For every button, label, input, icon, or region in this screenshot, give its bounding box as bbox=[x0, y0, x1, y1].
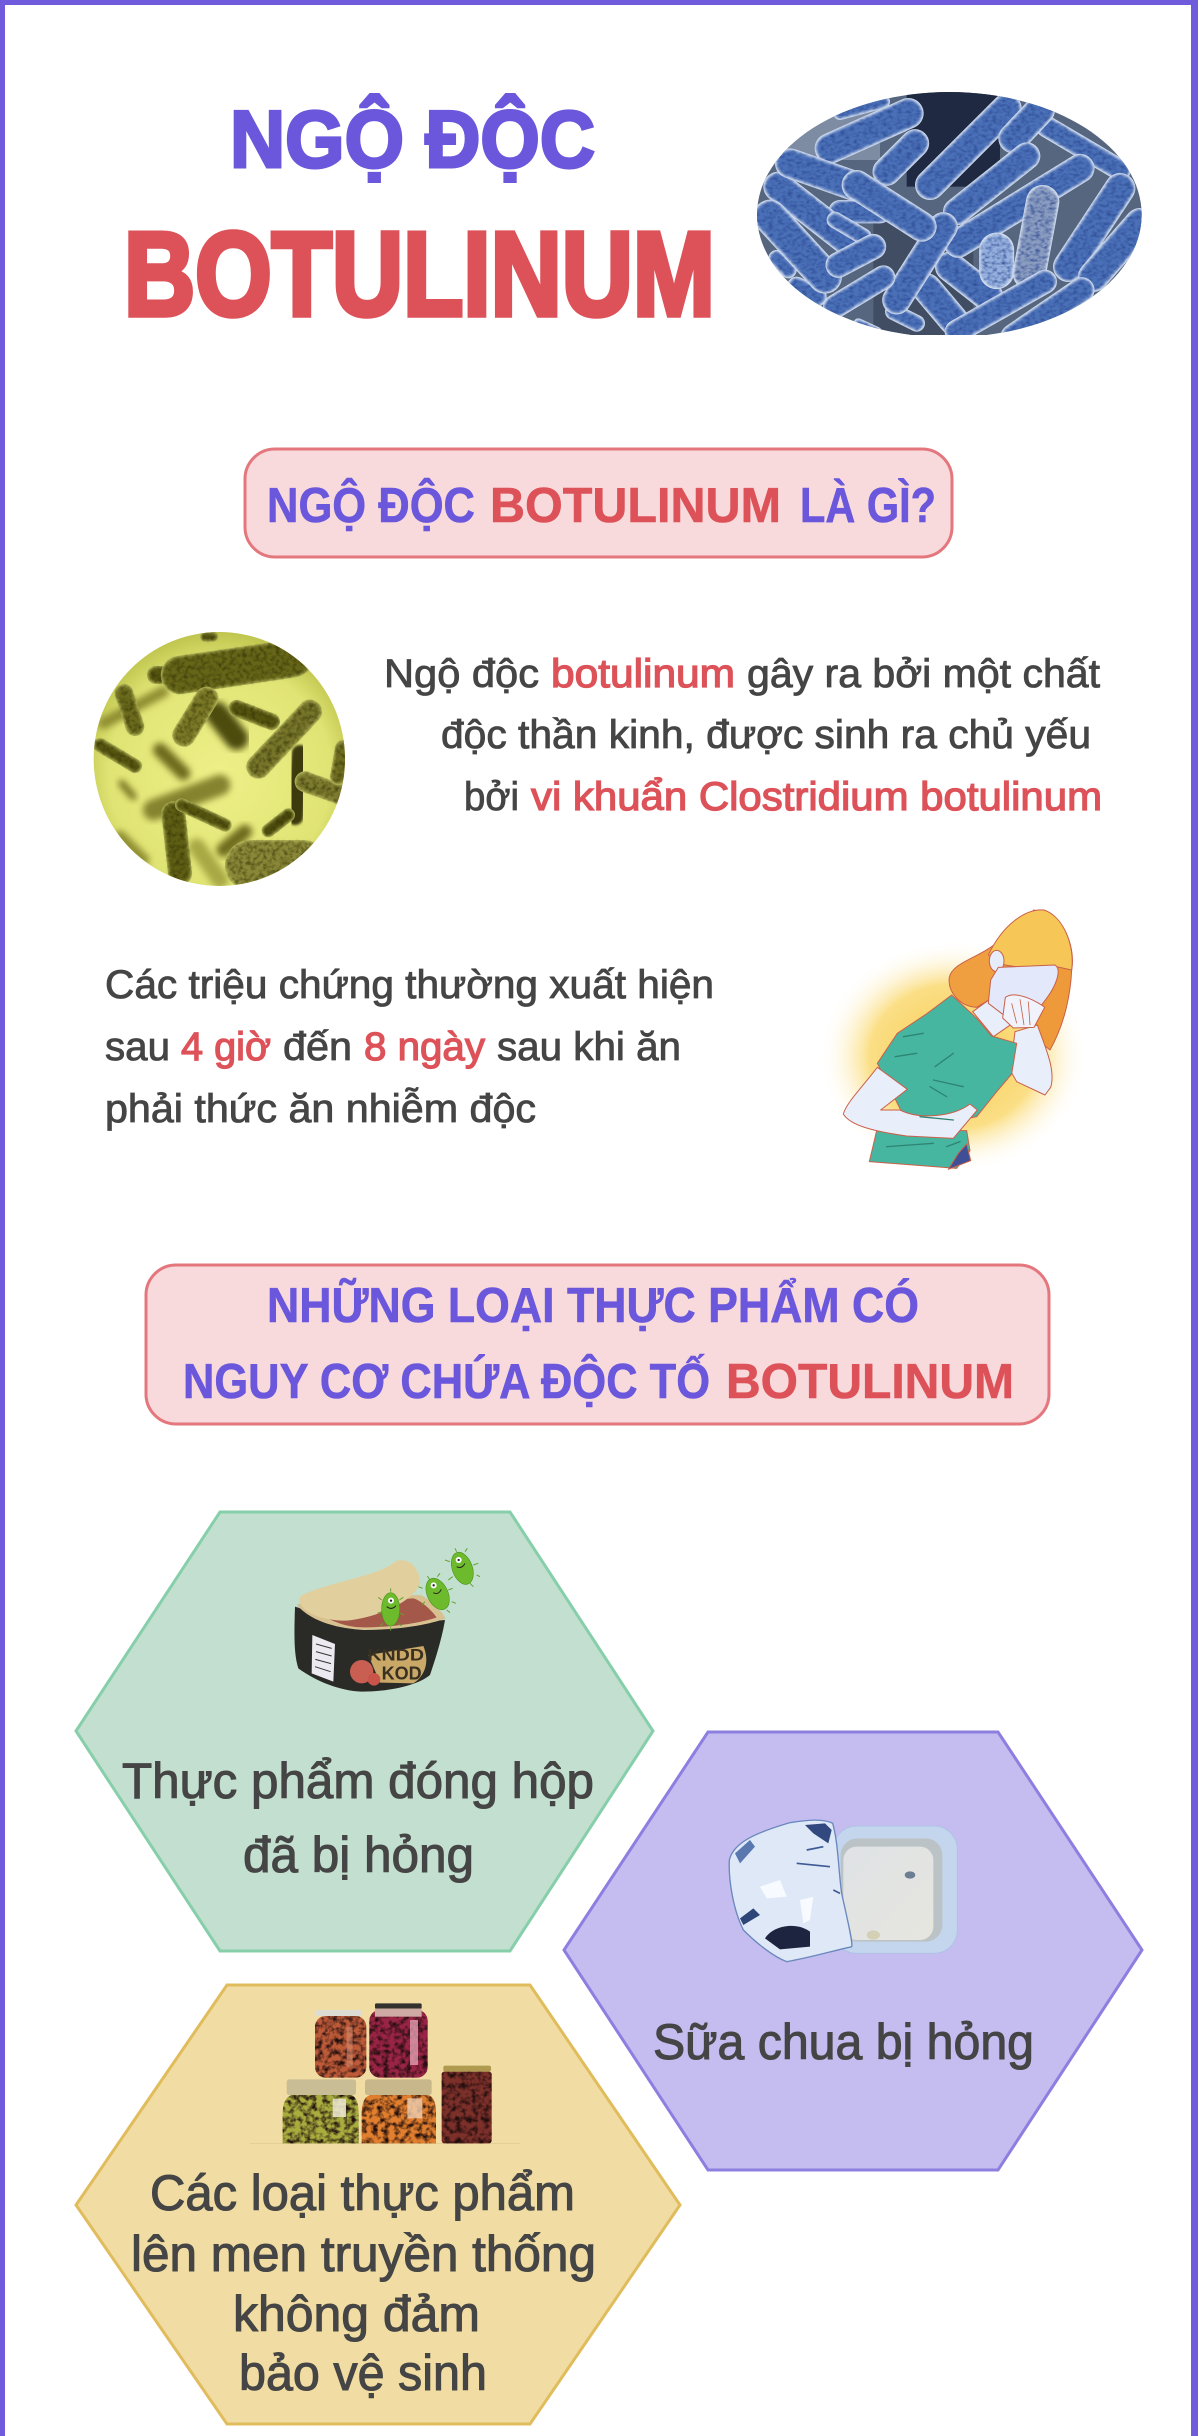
card label: Thực phẩm đóng hộp bbox=[122, 1753, 594, 1809]
heading pill: what is botulinum poisoning bbox=[245, 449, 952, 557]
text block: what botulinum is: botulinum bbox=[551, 652, 735, 696]
text block: symptoms timing: Các triệu chứng thường xuất hiện bbox=[105, 963, 714, 1007]
card label: Các loại thực phẩm bbox=[150, 2165, 575, 2221]
heading text: NGỘ ĐỘC bbox=[267, 478, 475, 533]
text block: symptoms timing: 8 ngày bbox=[364, 1025, 485, 1069]
card label bbox=[122, 1753, 594, 1883]
icon: spoiled yogurt cup bbox=[729, 1820, 957, 1962]
illustration: sick woman bbox=[818, 910, 1088, 1173]
text block: what botulinum is: Ngộ độc bbox=[384, 652, 539, 696]
heading text: LÀ GÌ? bbox=[800, 479, 936, 533]
arm across belly bbox=[843, 1067, 977, 1138]
hand bbox=[1003, 995, 1045, 1028]
text block: symptoms timing: sau bbox=[105, 1025, 170, 1069]
title line: ngộ độc: NGỘ ĐỘC bbox=[230, 94, 595, 185]
icon: spoiled can with bacteria bbox=[294, 1548, 480, 1692]
card label: đã bị hỏng bbox=[243, 1827, 474, 1883]
title bbox=[124, 94, 715, 341]
card label: không đảm bbox=[233, 2286, 480, 2342]
text block: symptoms timing: đến bbox=[283, 1025, 352, 1069]
heading text: BOTULINUM bbox=[490, 479, 781, 533]
image: yellow bacteria circle bbox=[94, 632, 345, 886]
hexagon card: spoiled yogurt bbox=[564, 1732, 1142, 2170]
text block: what botulinum is bbox=[384, 652, 1102, 819]
card label: Sữa chua bị hỏng bbox=[653, 2014, 1034, 2070]
face bbox=[988, 965, 1058, 1017]
card label: lên men truyền thống bbox=[131, 2226, 596, 2282]
glow bbox=[818, 940, 1088, 1173]
text block: symptoms timing: 4 giờ bbox=[181, 1025, 271, 1069]
heading text bbox=[267, 478, 936, 533]
text block: symptoms timing bbox=[105, 963, 714, 1131]
shirt bbox=[877, 995, 1017, 1130]
text block: what botulinum is: độc thần kinh, được sinh ra chủ yếu bbox=[441, 713, 1091, 757]
text block: symptoms timing: phải thức ăn nhiễm độc bbox=[105, 1086, 536, 1131]
heading text: NHỮNG LOẠI THỰC PHẨM CÓ bbox=[267, 1278, 919, 1333]
card label: bảo vệ sinh bbox=[239, 2345, 487, 2401]
hair top bbox=[988, 910, 1072, 970]
hexagon card: fermented food bbox=[76, 1985, 680, 2424]
heading pill: risky foods bbox=[146, 1265, 1049, 1424]
hexagon card: canned food bbox=[76, 1512, 653, 1951]
card label bbox=[131, 2165, 596, 2401]
text block: symptoms timing: sau khi ăn bbox=[497, 1025, 681, 1069]
heading text bbox=[183, 1278, 1014, 1409]
forearm bbox=[1010, 1025, 1052, 1095]
icon: spoiled can with bacteria: KNDD bbox=[367, 1646, 424, 1665]
text block: what botulinum is: gây ra bởi một chất bbox=[747, 652, 1100, 696]
hair back bbox=[1032, 910, 1072, 1050]
heading text: BOTULINUM bbox=[726, 1355, 1014, 1409]
image: blue bacteria oval bbox=[756, 92, 1142, 335]
icon: spoiled can with bacteria: KOD bbox=[382, 1662, 422, 1683]
text block: what botulinum is: bởi bbox=[464, 775, 519, 819]
neck bbox=[973, 997, 1013, 1037]
icon: fermented food jars bbox=[250, 2003, 520, 2144]
text block: what botulinum is: vi khuẩn Clostridium botulinum bbox=[531, 775, 1102, 819]
title line: botulinum: BOTULINUM bbox=[124, 208, 715, 341]
heading text: NGUY CƠ CHỨA ĐỘC TỐ bbox=[183, 1354, 710, 1409]
